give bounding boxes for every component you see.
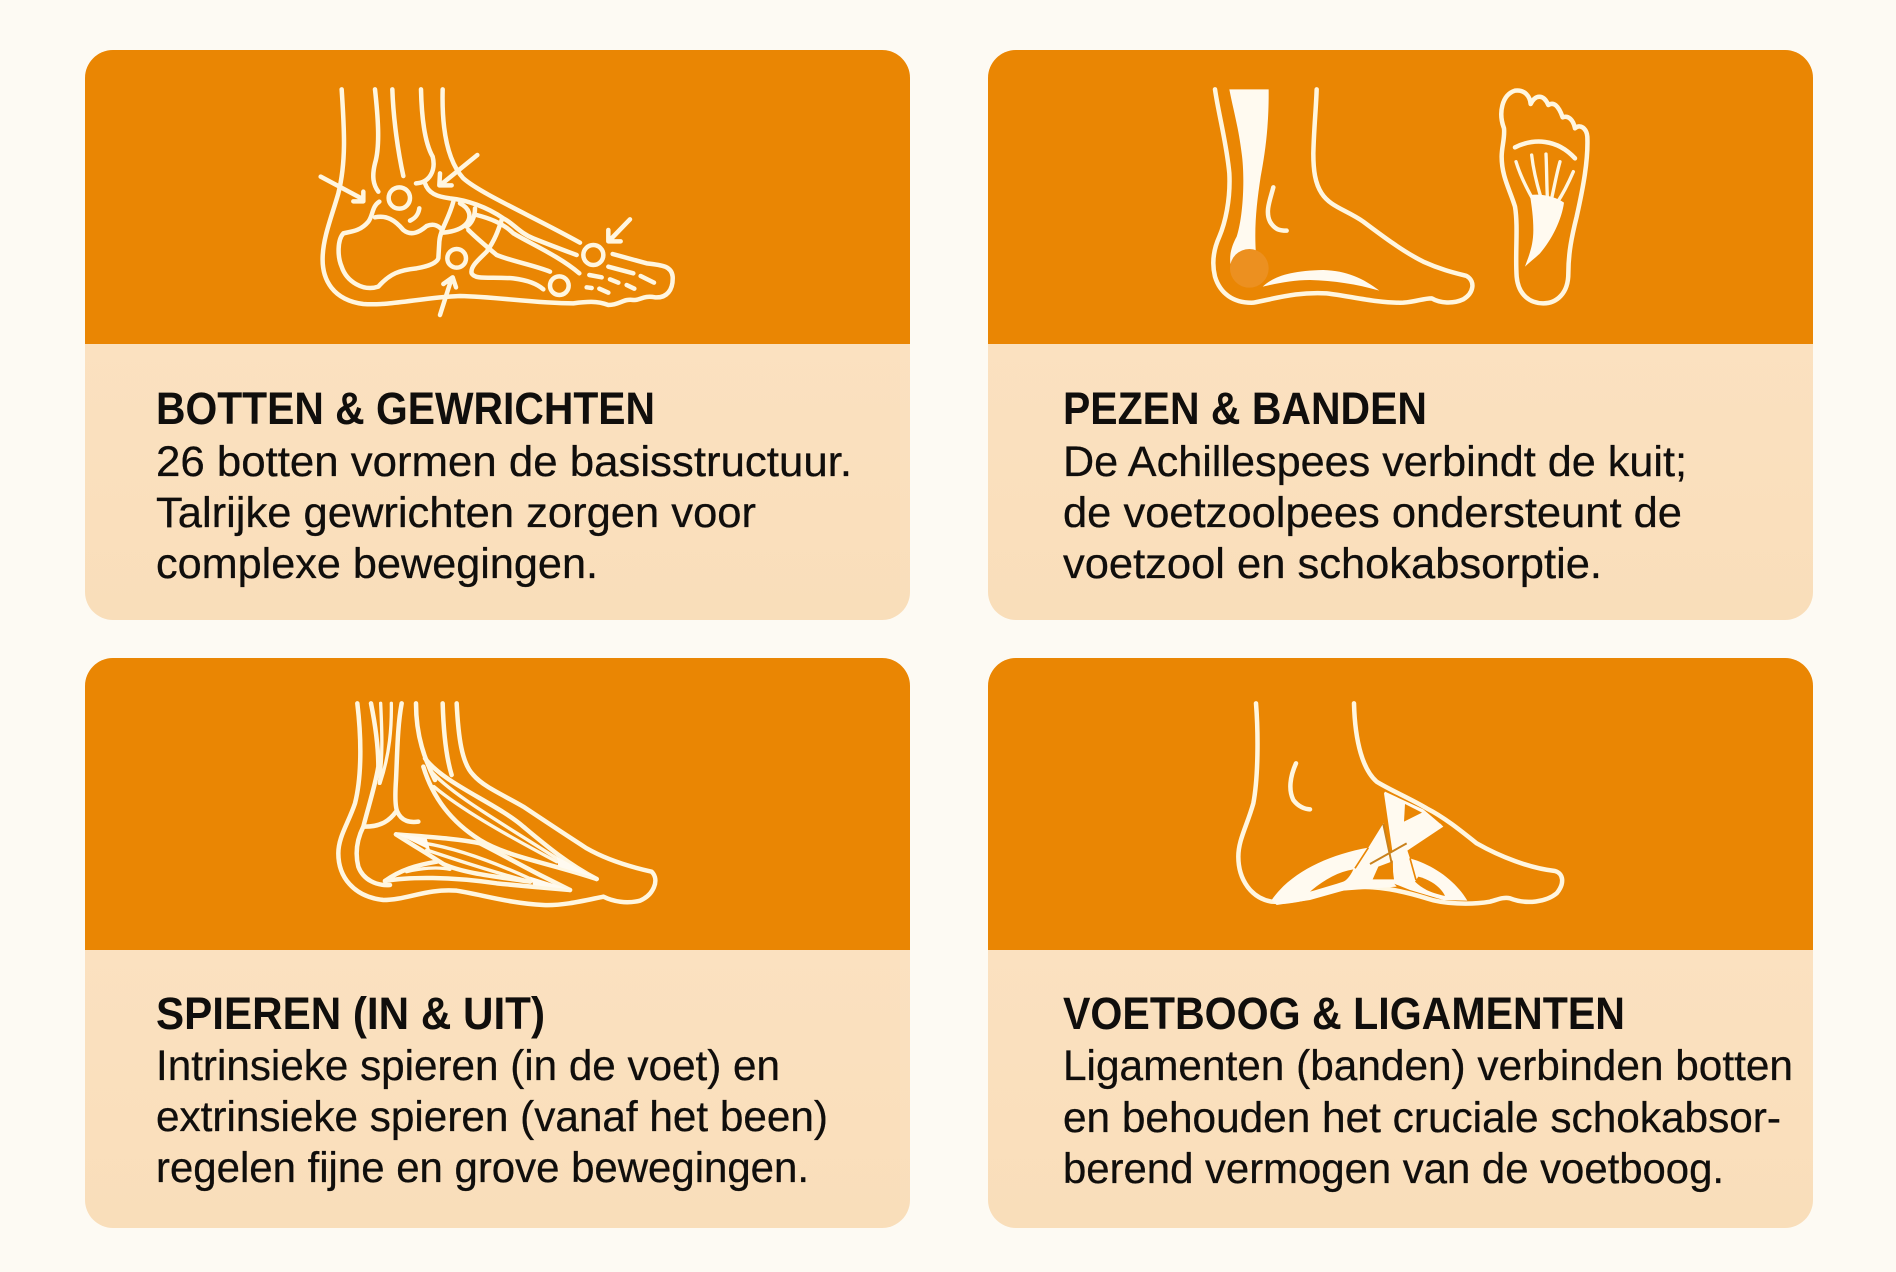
body line: 26 botten vormen de basisstructuur.: [156, 438, 852, 486]
heading: VOETBOOG & LIGAMENTEN: [1063, 988, 1625, 1039]
body line: extrinsieke spieren (vanaf het been): [156, 1093, 828, 1141]
panel text: voetboog & ligamenten: [1063, 988, 1793, 1193]
body line: de voetzoolpees ondersteunt de: [1063, 489, 1682, 537]
body line: De Achillespees verbindt de kuit;: [1063, 438, 1687, 486]
panel: botten & gewrichten: [85, 50, 910, 620]
icon: foot arch and ligaments: [1238, 703, 1562, 905]
icon: side foot with achilles tendon: [1213, 89, 1587, 303]
body line: en behouden het cruciale schokabsor-: [1063, 1094, 1781, 1142]
body line: complexe bewegingen.: [156, 540, 598, 588]
heading: BOTTEN & GEWRICHTEN: [156, 383, 655, 434]
upper muscle: [425, 758, 597, 879]
panel text: botten & gewrichten: [156, 383, 852, 588]
panel text: spieren: [156, 988, 828, 1192]
icon: sole with plantar fascia: [1501, 91, 1587, 303]
body line: voetzool en schokabsorptie.: [1063, 540, 1602, 588]
panel text: pezen & banden: [1063, 383, 1687, 588]
body line: berend vermogen van de voetboog.: [1063, 1145, 1724, 1193]
body line: Intrinsieke spieren (in de voet) en: [156, 1042, 780, 1090]
body line: Ligamenten (banden) verbinden botten: [1063, 1042, 1793, 1090]
heading: SPIEREN (IN & UIT): [156, 988, 545, 1039]
body line: Talrijke gewrichten zorgen voor: [156, 489, 756, 537]
panel: pezen & banden: [988, 50, 1813, 620]
body line: regelen fijne en grove bewegingen.: [156, 1144, 809, 1192]
icon: foot bones and joints with arrows: [321, 89, 673, 315]
panel: spieren: [85, 658, 910, 1228]
heading: PEZEN & BANDEN: [1063, 383, 1427, 434]
lower muscle: [396, 834, 570, 890]
panel: voetboog & ligamenten: [988, 658, 1813, 1228]
icon: foot muscles: [338, 703, 655, 905]
